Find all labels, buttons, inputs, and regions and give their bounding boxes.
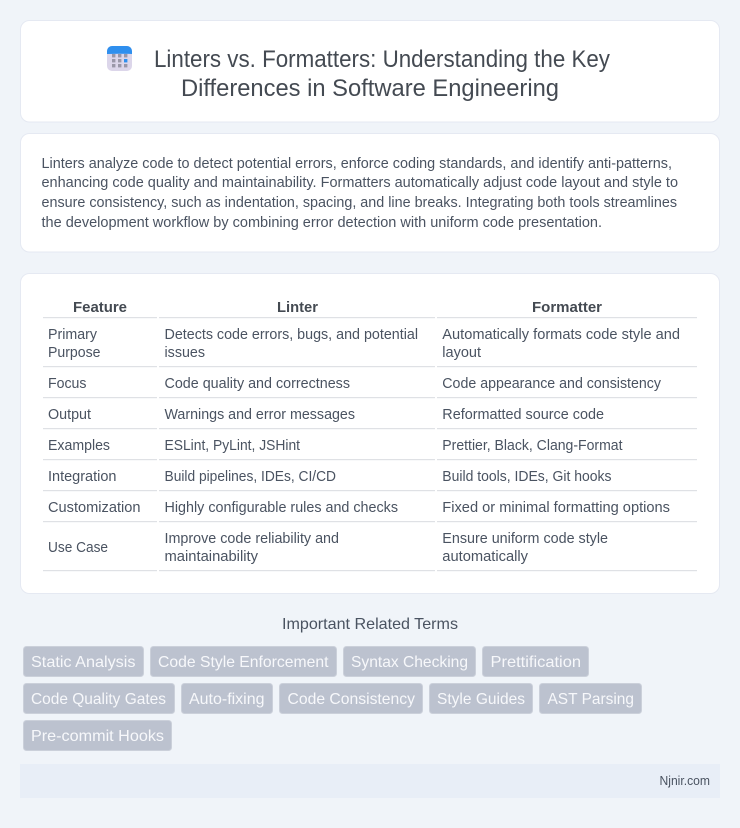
title: Linters vs. Formatters: Understanding the Key xyxy=(154,46,610,73)
text block: introduction paragraph: ensure consistency, such as indentation, spacing, and line breaks. Integrating both tools streamlines xyxy=(42,195,677,211)
table row: Use Case: Ensure uniform code style xyxy=(442,531,608,547)
table row: Use Case xyxy=(43,531,697,571)
tag: Pre-commit Hooks: Pre-commit Hooks xyxy=(31,728,164,745)
table header row: Linter xyxy=(277,300,318,316)
tag: Code Quality Gates: Code Quality Gates xyxy=(31,691,166,708)
tag: Code Consistency xyxy=(280,684,422,714)
tag: Static Analysis xyxy=(24,646,144,676)
table row: Focus xyxy=(43,376,697,398)
table row: Focus: Code quality and correctness xyxy=(164,376,350,392)
tag: Style Guides: Style Guides xyxy=(437,691,525,708)
tag: Syntax Checking: Syntax Checking xyxy=(351,654,468,671)
tag: Auto-fixing: Auto-fixing xyxy=(189,691,264,708)
table row: Focus: Focus xyxy=(48,376,86,392)
table header row xyxy=(43,300,697,318)
tag: Auto-fixing xyxy=(182,684,272,714)
table row: Use Case: automatically xyxy=(442,549,529,565)
tag group: related terms xyxy=(24,646,642,750)
text block: introduction paragraph: Linters analyze code to detect potential errors, enforce coding standards, and identify anti-patterns, xyxy=(42,156,672,172)
heading: important related terms: Important Related Terms xyxy=(282,616,458,633)
table row: Primary Purpose: Primary xyxy=(48,327,98,343)
icon: calendar xyxy=(107,46,132,71)
text block: introduction paragraph: the development workflow by combining error detection with uniform code presentation. xyxy=(42,215,602,231)
table row: Use Case: Improve code reliability and xyxy=(164,531,339,547)
table row: Primary Purpose: Purpose xyxy=(48,345,100,361)
tag: Prettification: Prettification xyxy=(490,654,581,671)
tag: Syntax Checking xyxy=(344,646,476,676)
tag: Style Guides xyxy=(430,684,532,714)
table row: Examples: ESLint, PyLint, JSHint xyxy=(164,438,300,454)
panel: header xyxy=(20,20,720,122)
table row: Primary Purpose xyxy=(43,327,697,367)
panel: introduction xyxy=(20,134,720,252)
footer xyxy=(20,764,720,798)
tag: AST Parsing xyxy=(540,684,642,714)
table row: Primary Purpose: layout xyxy=(442,345,481,361)
text block: introduction paragraph xyxy=(42,156,678,231)
table row: Integration: Build tools, IDEs, Git hooks xyxy=(442,469,612,485)
table row: Customization xyxy=(43,500,697,522)
title xyxy=(154,46,610,102)
table row: Customization: Highly configurable rules and checks xyxy=(164,500,398,516)
table header row: Formatter xyxy=(532,300,602,316)
table row: Focus: Code appearance and consistency xyxy=(442,376,662,392)
tag: Prettification xyxy=(482,646,588,676)
table row: Customization: Customization xyxy=(48,500,140,516)
table row: Integration: Build pipelines, IDEs, CI/CD xyxy=(164,469,336,485)
tag: Code Consistency: Code Consistency xyxy=(288,691,415,708)
table row: Primary Purpose: Automatically formats code style and xyxy=(442,327,680,343)
table row: Primary Purpose: issues xyxy=(164,345,205,361)
tag: Static Analysis: Static Analysis xyxy=(31,654,136,671)
table row: Primary Purpose: Detects code errors, bugs, and potential xyxy=(164,327,418,343)
table header row: Feature xyxy=(73,300,127,316)
table row: Integration: Integration xyxy=(48,469,116,485)
table row: Integration xyxy=(43,469,697,491)
table row: Output: Output xyxy=(48,407,91,423)
tag: Code Style Enforcement xyxy=(150,646,336,676)
table row: Use Case: maintainability xyxy=(164,549,259,565)
table row: Output xyxy=(43,407,697,429)
table row: Customization: Fixed or minimal formatting options xyxy=(442,500,670,516)
table row: Examples: Examples xyxy=(48,438,110,454)
panel: comparison table xyxy=(20,274,720,594)
table row: Use Case: Use Case xyxy=(48,540,108,556)
tag: AST Parsing: AST Parsing xyxy=(548,691,634,708)
table row: Examples: Prettier, Black, Clang-Format xyxy=(442,438,622,454)
title: Differences in Software Engineering xyxy=(181,75,559,102)
table row: Output: Warnings and error messages xyxy=(164,407,355,423)
text block: introduction paragraph: enhancing code quality and maintainability. Formatters automatically adjust code layout and style to xyxy=(42,175,678,191)
table row: Output: Reformatted source code xyxy=(442,407,604,423)
tag: Code Quality Gates xyxy=(24,684,174,714)
table row: Examples xyxy=(43,438,697,460)
tag: Code Style Enforcement: Code Style Enforcement xyxy=(158,654,329,671)
tag: Pre-commit Hooks xyxy=(24,720,172,750)
footer credit: Njnir.com xyxy=(660,774,710,788)
